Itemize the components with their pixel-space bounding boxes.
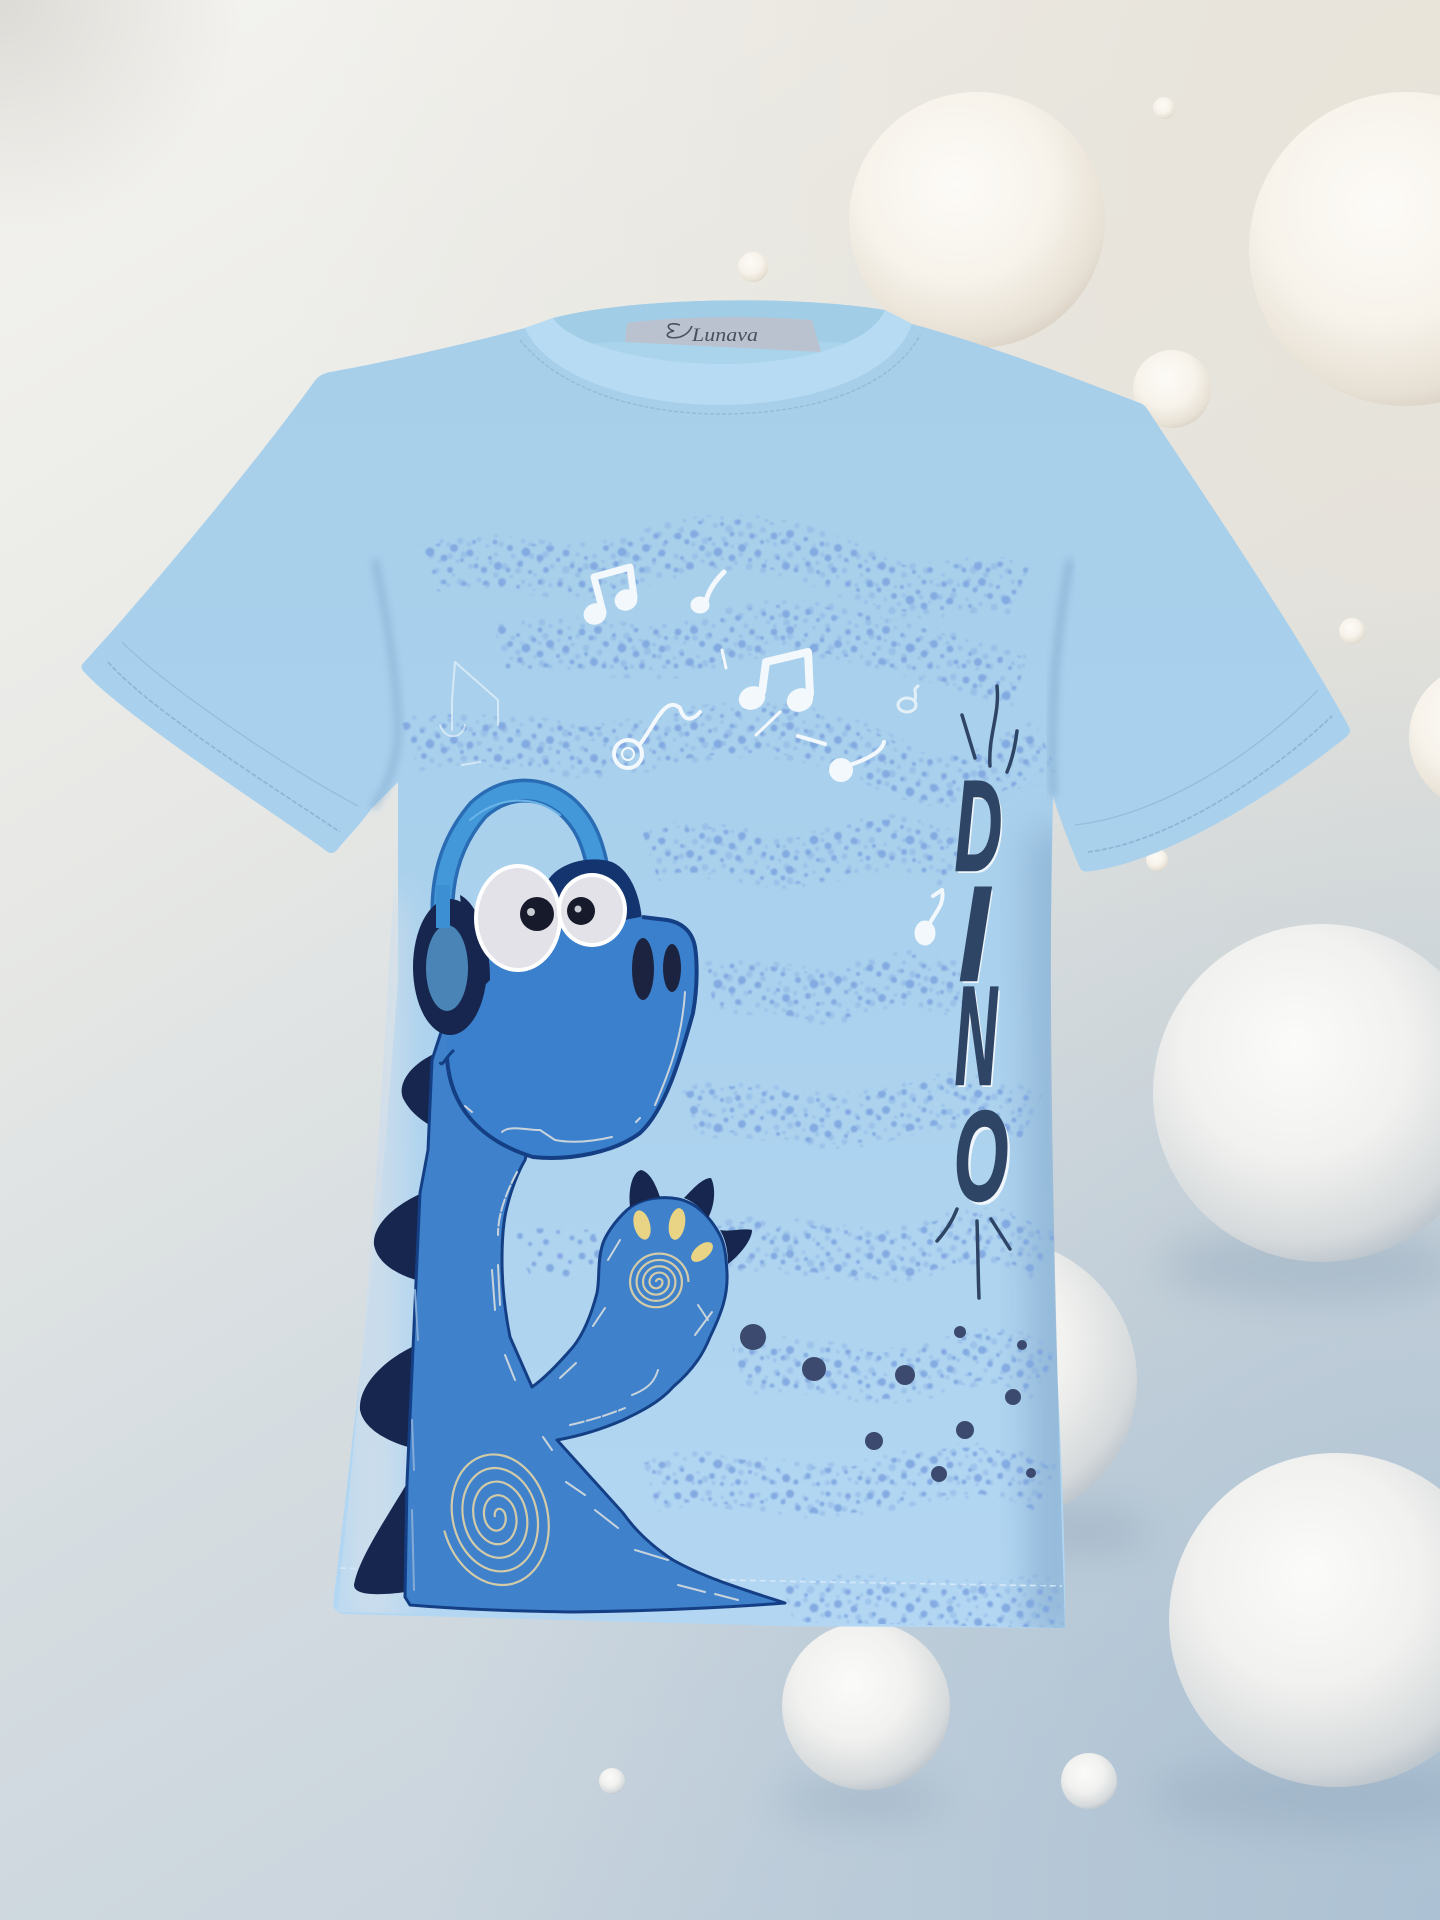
body and arm: [405, 1020, 785, 1612]
sphere shadows: [775, 1229, 1440, 1831]
dino dots: [740, 1324, 1036, 1482]
spheres: [599, 92, 1440, 1809]
DINO lettering: [954, 755, 1011, 1231]
letters white outline: N: [957, 960, 1000, 1117]
side shading: [345, 830, 1080, 1640]
letters white outline: O: [957, 1089, 1011, 1231]
gold spirals: [428, 1254, 688, 1597]
letters white outline: I: [961, 863, 993, 1012]
neckband stitch: [520, 335, 920, 414]
paw claws: [629, 1170, 752, 1264]
collar back and label: [553, 300, 885, 368]
hem stitching: [340, 1568, 1062, 1586]
neckband: [525, 310, 912, 405]
body stitches: [412, 1172, 738, 1600]
t-shirt: [82, 300, 1350, 1640]
headphone band: [442, 791, 597, 925]
music notes: [440, 567, 943, 945]
note: faint left: [440, 662, 498, 765]
letters navy: N: [955, 957, 998, 1114]
head outline: [447, 917, 697, 1158]
eyes: [474, 864, 627, 972]
note: small right: [898, 686, 918, 712]
smile: [440, 1050, 454, 1064]
head stitches: [465, 992, 685, 1142]
back spikes: [354, 1054, 434, 1594]
headphone cup: [413, 885, 490, 1035]
head crest: [548, 859, 642, 940]
letters navy: I: [959, 860, 991, 1009]
shirt silhouette: [82, 300, 1350, 1628]
DINO rays: [937, 686, 1017, 1298]
dotted wave print: [410, 542, 1060, 1610]
paw toes: [630, 1207, 716, 1266]
note: double top left: [581, 567, 640, 628]
letters navy: O: [954, 1085, 1008, 1227]
dino applique: [354, 791, 785, 1612]
nostrils: [632, 938, 681, 1000]
note: by DINO: [915, 890, 943, 945]
sleeve seams and shading: [108, 560, 1332, 852]
note: swirl: [614, 705, 700, 768]
letters navy: D: [955, 755, 1002, 898]
note: single top: [691, 572, 724, 613]
note: large double: [722, 650, 816, 735]
note: sideways: [798, 736, 884, 782]
head: [447, 917, 697, 1158]
letters white outline: [957, 758, 1011, 1231]
letters white outline: D: [957, 758, 1004, 901]
letters navy: [954, 755, 1008, 1227]
collar back and label: Lunava: [691, 325, 758, 346]
